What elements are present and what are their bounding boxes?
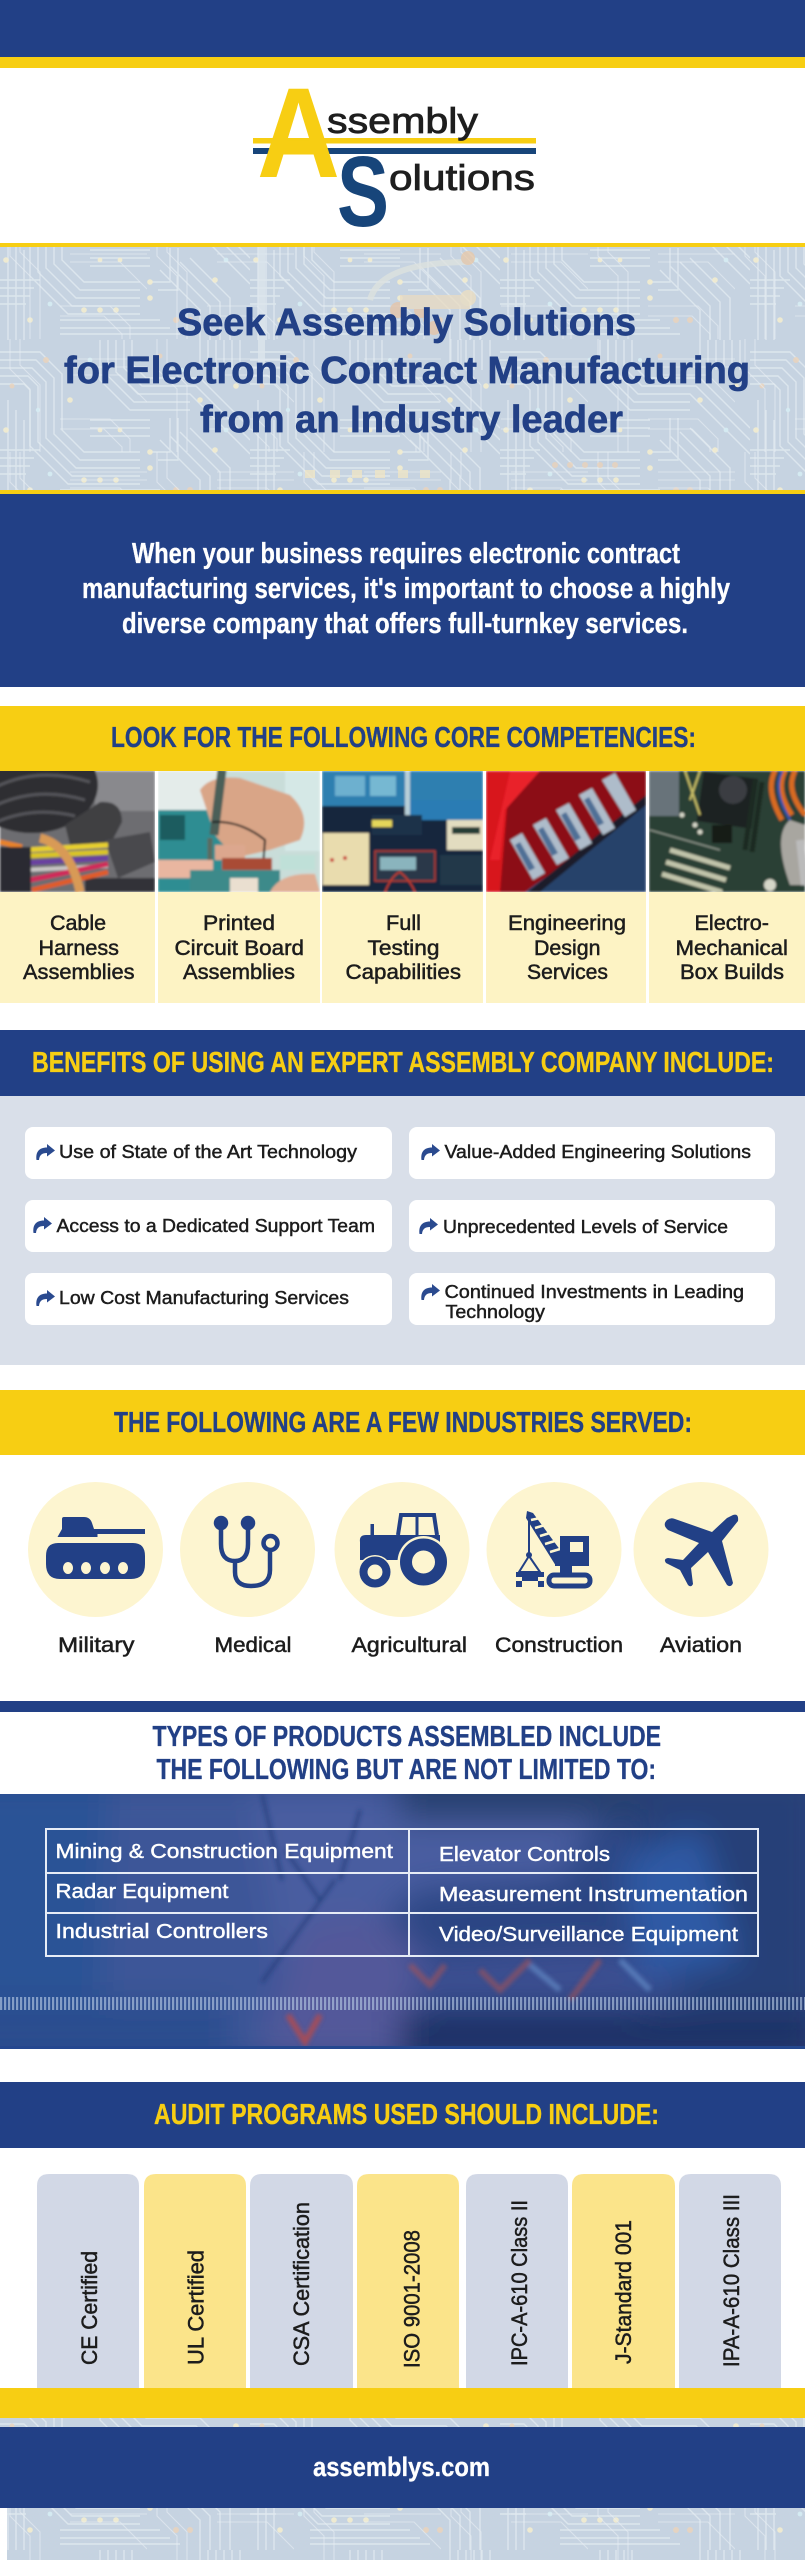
- label: cable harness assemblies: Assemblies: [23, 961, 134, 984]
- label: printed circuit board assemblies: Circuit Board: [174, 937, 304, 960]
- industry: medical: [180, 1482, 315, 1657]
- heading: product types: TYPES OF PRODUCTS ASSEMBLED INCLUDE: [152, 1721, 661, 1753]
- industry: agricultural: [334, 1482, 470, 1657]
- tab: J-Standard 001: [572, 2174, 675, 2388]
- industry: construction: Construction: [495, 1634, 623, 1657]
- industry: military: Military: [58, 1634, 135, 1657]
- label: cable harness assemblies: Cable: [50, 912, 106, 935]
- label: full testing capabilities: Capabilities: [346, 961, 461, 984]
- product table: Industrial Controllers: [56, 1921, 268, 1943]
- heading: product types: [0, 1701, 805, 1786]
- logo: [253, 62, 536, 248]
- top banner: [0, 0, 805, 68]
- intro panel: [0, 494, 805, 687]
- tab: UL Certified: [144, 2174, 246, 2388]
- industry: aviation: [634, 1482, 768, 1657]
- product table: Video/Surveillance Equipment: [439, 1924, 738, 1946]
- photo: motherboard: [649, 771, 805, 892]
- benefit card: continued investments: [409, 1273, 775, 1325]
- industry: construction: [486, 1482, 623, 1657]
- product table: [46, 1829, 758, 1956]
- tab: ISO 9001-2008: ISO 9001-2008: [400, 2230, 424, 2368]
- tab: CE Certified: CE Certified: [77, 2251, 102, 2365]
- benefit card: support team: [25, 1200, 392, 1252]
- label: cable harness assemblies: Harness: [38, 937, 119, 960]
- tab: J-Standard 001: J-Standard 001: [611, 2220, 636, 2364]
- label: full testing capabilities: Testing: [368, 937, 440, 960]
- photo: testing equipment: [322, 771, 483, 892]
- title: from an Industry leader: [200, 399, 623, 441]
- label: engineering design services: Design: [534, 937, 600, 960]
- industry: aviation: Aviation: [660, 1634, 742, 1657]
- icon: tank: [46, 1517, 145, 1579]
- tab: CSA Certification: CSA Certification: [289, 2202, 314, 2366]
- intro panel: diverse company that offers full-turnkey services.: [122, 608, 688, 640]
- product table: Measurement Instrumentation: [439, 1884, 748, 1906]
- label: electro-mechanical box builds: Electro-: [694, 912, 769, 935]
- label: cable harness assemblies: [23, 912, 134, 984]
- tab: UL Certified: UL Certified: [184, 2250, 208, 2365]
- label: printed circuit board assemblies: Printed: [203, 912, 275, 935]
- benefit card: levels of service: Unprecedented Levels of Service: [443, 1216, 728, 1237]
- tab: ISO 9001-2008: [357, 2174, 459, 2388]
- benefit card: continued investments: Technology: [446, 1301, 546, 1322]
- label: electro-mechanical box builds: [676, 912, 788, 984]
- tab: IPA-A-610 Class III: [679, 2174, 781, 2388]
- heading: benefits: [0, 1030, 805, 1096]
- intro panel: When your business requires electronic contract: [132, 538, 680, 570]
- benefit card: levels of service: [409, 1200, 775, 1252]
- benefit card: state of the art: [25, 1127, 392, 1179]
- label: printed circuit board assemblies: Assemblies: [183, 961, 295, 984]
- tab: IPC-A-610 Class II: [466, 2174, 568, 2388]
- hero panel: circuit background with title: [0, 243, 805, 494]
- benefit card: low cost manufacturing: [25, 1273, 392, 1325]
- benefit card: engineering solutions: [409, 1127, 775, 1179]
- benefit card: continued investments: Continued Investments in Leading: [444, 1281, 744, 1302]
- tab: IPA-A-610 Class III: IPA-A-610 Class III: [719, 2194, 744, 2367]
- benefit card: support team: Access to a Dedicated Support Team: [56, 1215, 375, 1236]
- benefit card: engineering solutions: Value-Added Engineering Solutions: [444, 1141, 751, 1162]
- label: engineering design services: Engineering: [508, 912, 626, 935]
- industry: military: [28, 1482, 163, 1657]
- label: full testing capabilities: [346, 912, 461, 984]
- label: electro-mechanical box builds: Mechanical: [676, 937, 788, 960]
- panel: products on photo background: [0, 1794, 805, 2049]
- heading: core competencies: [0, 706, 805, 771]
- photo: cables: [0, 771, 155, 892]
- label: engineering design services: [508, 912, 626, 984]
- industry: medical: Medical: [214, 1634, 292, 1657]
- tab: IPC-A-610 Class II: IPC-A-610 Class II: [507, 2200, 532, 2366]
- photo: engineering chip: [486, 771, 646, 892]
- industry: agricultural: Agricultural: [352, 1634, 467, 1657]
- product table: Radar Equipment: [56, 1881, 229, 1903]
- label: printed circuit board assemblies: [174, 912, 304, 984]
- label: engineering design services: Services: [527, 961, 608, 984]
- footer bands with website: [0, 2388, 805, 2560]
- product table: Elevator Controls: [439, 1844, 610, 1866]
- icon: stethoscope: [216, 1518, 278, 1586]
- benefit card: low cost manufacturing: Low Cost Manufacturing Services: [59, 1287, 349, 1308]
- footer bands with website: assemblys.com: [313, 2452, 490, 2482]
- label: electro-mechanical box builds: Box Builds: [680, 961, 784, 984]
- icon: plane: [665, 1515, 738, 1586]
- benefit card: state of the art: Use of State of the Art Technology: [59, 1141, 358, 1162]
- icon: tractor: [358, 1515, 450, 1589]
- icon: crane: [516, 1511, 590, 1587]
- title: [64, 302, 750, 441]
- logo: olutions: [389, 157, 535, 198]
- logo: S: [337, 136, 389, 248]
- photo: circuit board assembly: [158, 770, 320, 892]
- panel: competencies: [0, 771, 805, 1003]
- logo: ssembly: [327, 100, 478, 141]
- panel: audit tabs: [37, 2174, 781, 2388]
- logo: A: [257, 62, 340, 205]
- heading: industries: [0, 1390, 805, 1455]
- panel: benefits: [0, 1096, 805, 1365]
- tab: CSA Certification: [250, 2174, 353, 2388]
- title: Seek Assembly Solutions: [177, 302, 636, 344]
- product table: Mining & Construction Equipment: [56, 1841, 393, 1863]
- tab: CE Certified: [37, 2174, 139, 2388]
- heading: audit programs: [0, 2082, 805, 2148]
- heading: product types: THE FOLLOWING BUT ARE NOT LIMITED TO:: [156, 1754, 656, 1786]
- heading: audit programs: AUDIT PROGRAMS USED SHOULD INCLUDE:: [154, 2099, 659, 2131]
- title: for Electronic Contract Manufacturing: [64, 350, 750, 392]
- label: full testing capabilities: Full: [386, 912, 421, 935]
